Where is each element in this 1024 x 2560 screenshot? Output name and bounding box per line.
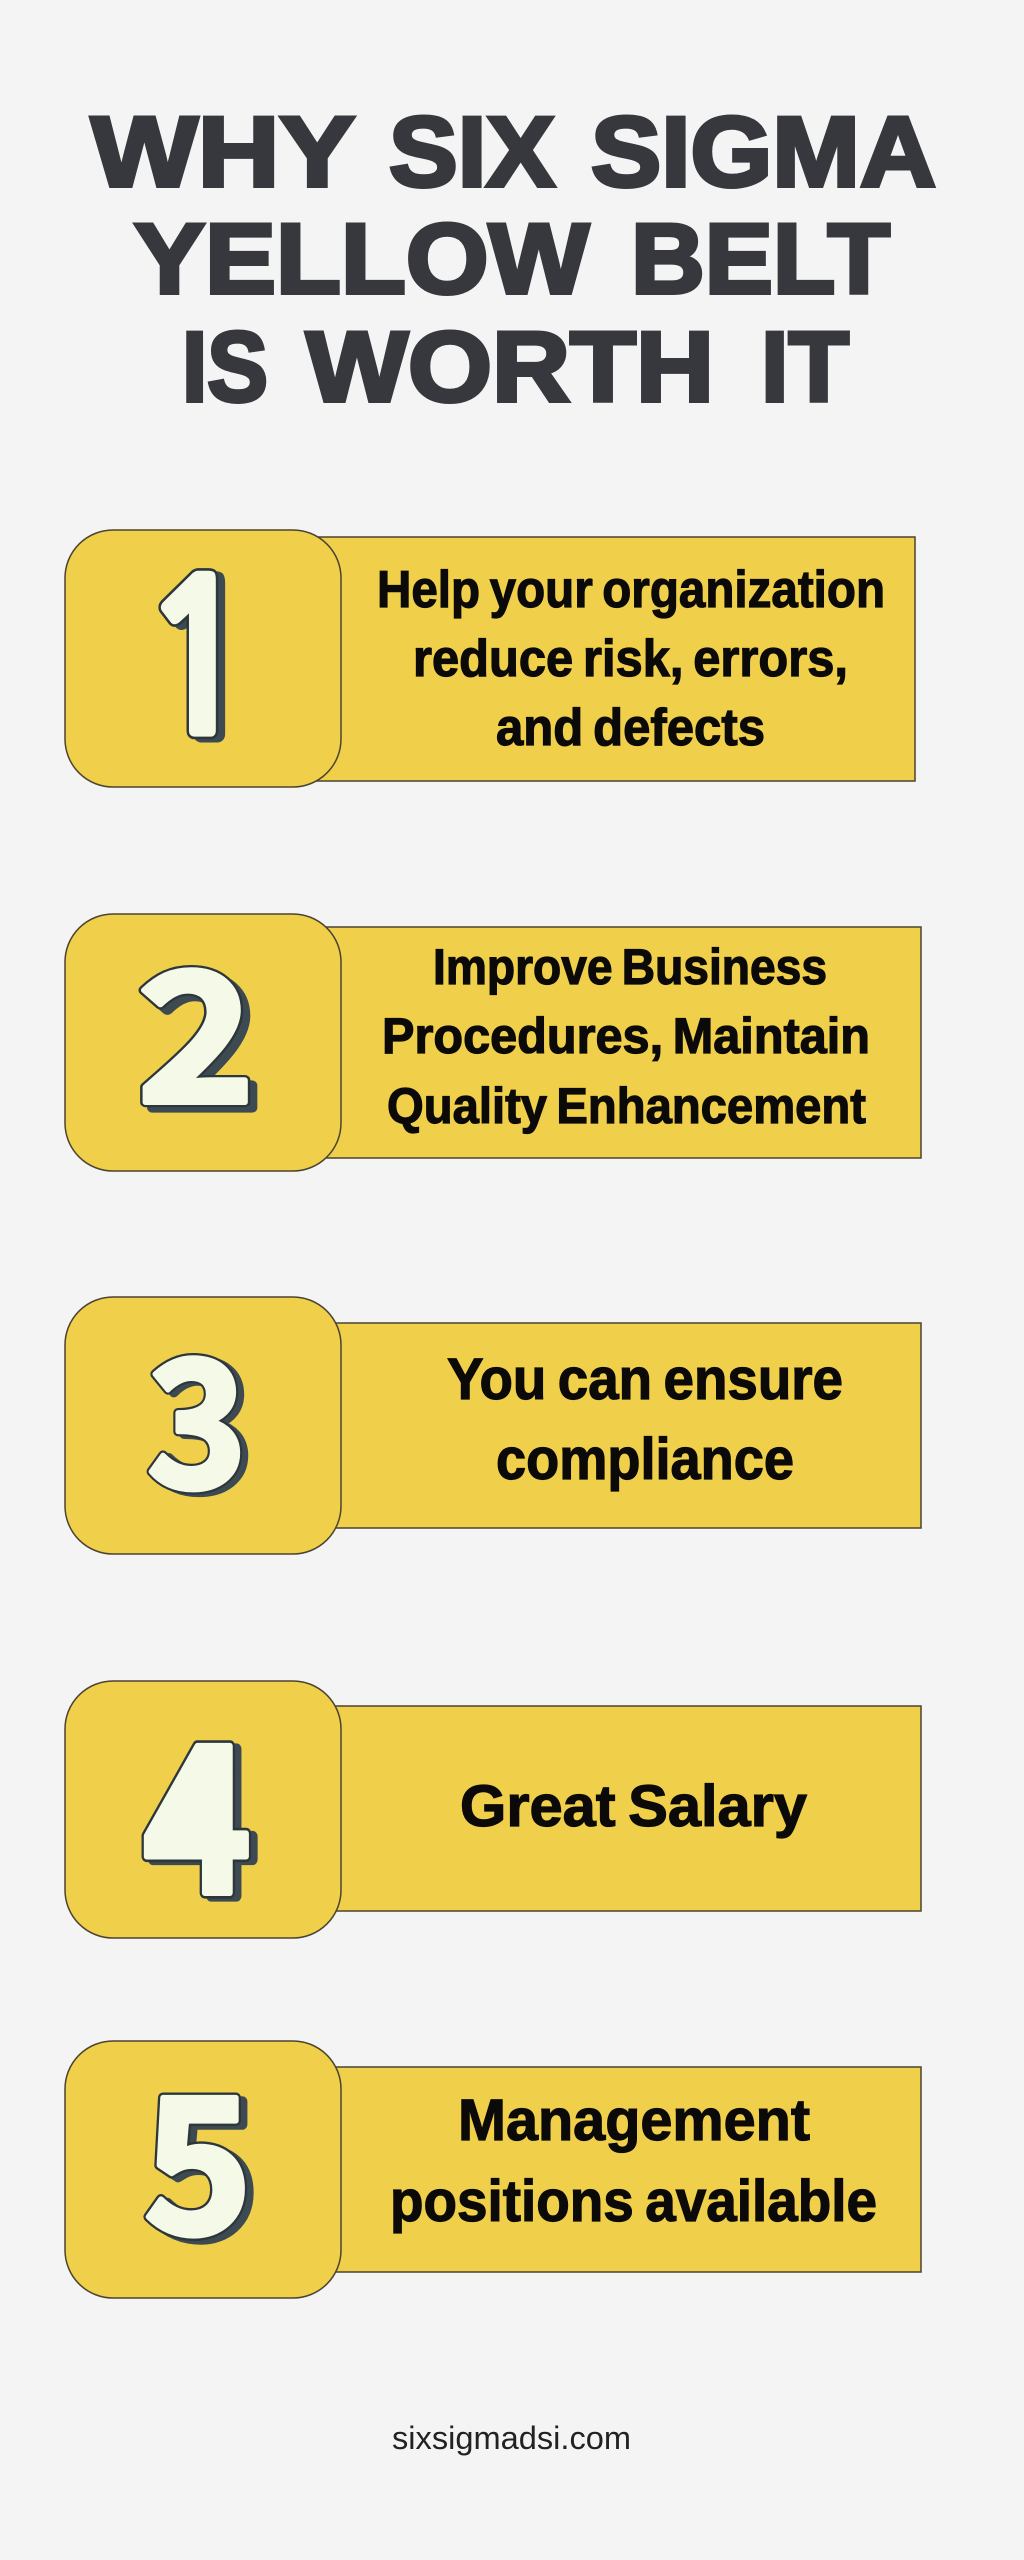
number tile 5 [65, 2041, 341, 2298]
text: item 2: Procedures, Maintain [382, 1008, 870, 1064]
number 4: 4 [143, 1657, 251, 1952]
title [91, 96, 936, 422]
number 3: 3 [153, 1285, 253, 1541]
panel: item 1 [65, 530, 915, 787]
number 4: 4 [143, 1657, 251, 1952]
title: SIGMA [591, 96, 936, 207]
number 5: 5 [144, 2015, 252, 2288]
text: item 5 [390, 2088, 877, 2234]
number 2: 2 [137, 893, 255, 1154]
banner 4 [300, 1706, 921, 1911]
panel: item 5 [65, 2015, 921, 2298]
text: item 1: Help your organization [377, 561, 885, 619]
number 3: 3 [147, 1283, 247, 1538]
number 2: 2 [137, 893, 255, 1154]
title: IS [182, 311, 268, 422]
banner 2 [300, 927, 921, 1158]
text: item 1: and defects [496, 699, 765, 757]
title: WORTH [306, 311, 714, 422]
banner 5 [300, 2067, 921, 2272]
number tile 3 [65, 1297, 341, 1554]
footer website: sixsigmadsi.com [392, 2420, 631, 2456]
number tile 1 [65, 530, 341, 787]
text: item 2: Improve Business [433, 939, 827, 995]
text: item 5: positions available [390, 2169, 877, 2234]
number 5: 5 [144, 2015, 252, 2288]
number tile 4 [65, 1681, 341, 1938]
text: item 3 [447, 1347, 843, 1492]
title: WHY [91, 96, 355, 207]
number 5: 5 [150, 2019, 259, 2292]
title: IT [761, 311, 849, 422]
number 2: 2 [144, 899, 262, 1160]
title: YELLOW [134, 203, 590, 314]
text: item 5: Management [458, 2088, 810, 2153]
banner 1 [300, 537, 915, 781]
number 1: 1 [145, 560, 264, 768]
text: item 2: Quality Enhancement [387, 1078, 866, 1134]
text: item 3: You can ensure [447, 1347, 843, 1412]
text: item 4: Great Salary [460, 1774, 807, 1839]
text: item 1 [377, 561, 885, 757]
number 4: 4 [149, 1660, 258, 1955]
number 3: 3 [147, 1283, 247, 1538]
title: SIX [389, 96, 555, 207]
text: item 2 [382, 939, 870, 1134]
banner 3 [300, 1323, 921, 1528]
text: item 3: compliance [496, 1427, 794, 1492]
number 1: 1 [139, 557, 257, 765]
number 1: 1 [139, 557, 257, 765]
panel: item 4 [65, 1657, 921, 1955]
panel: item 3 [65, 1283, 921, 1554]
text: item 1: reduce risk, errors, [413, 630, 848, 688]
title: BELT [631, 203, 890, 314]
panel: item 2 [65, 893, 921, 1171]
number tile 2 [65, 914, 341, 1171]
